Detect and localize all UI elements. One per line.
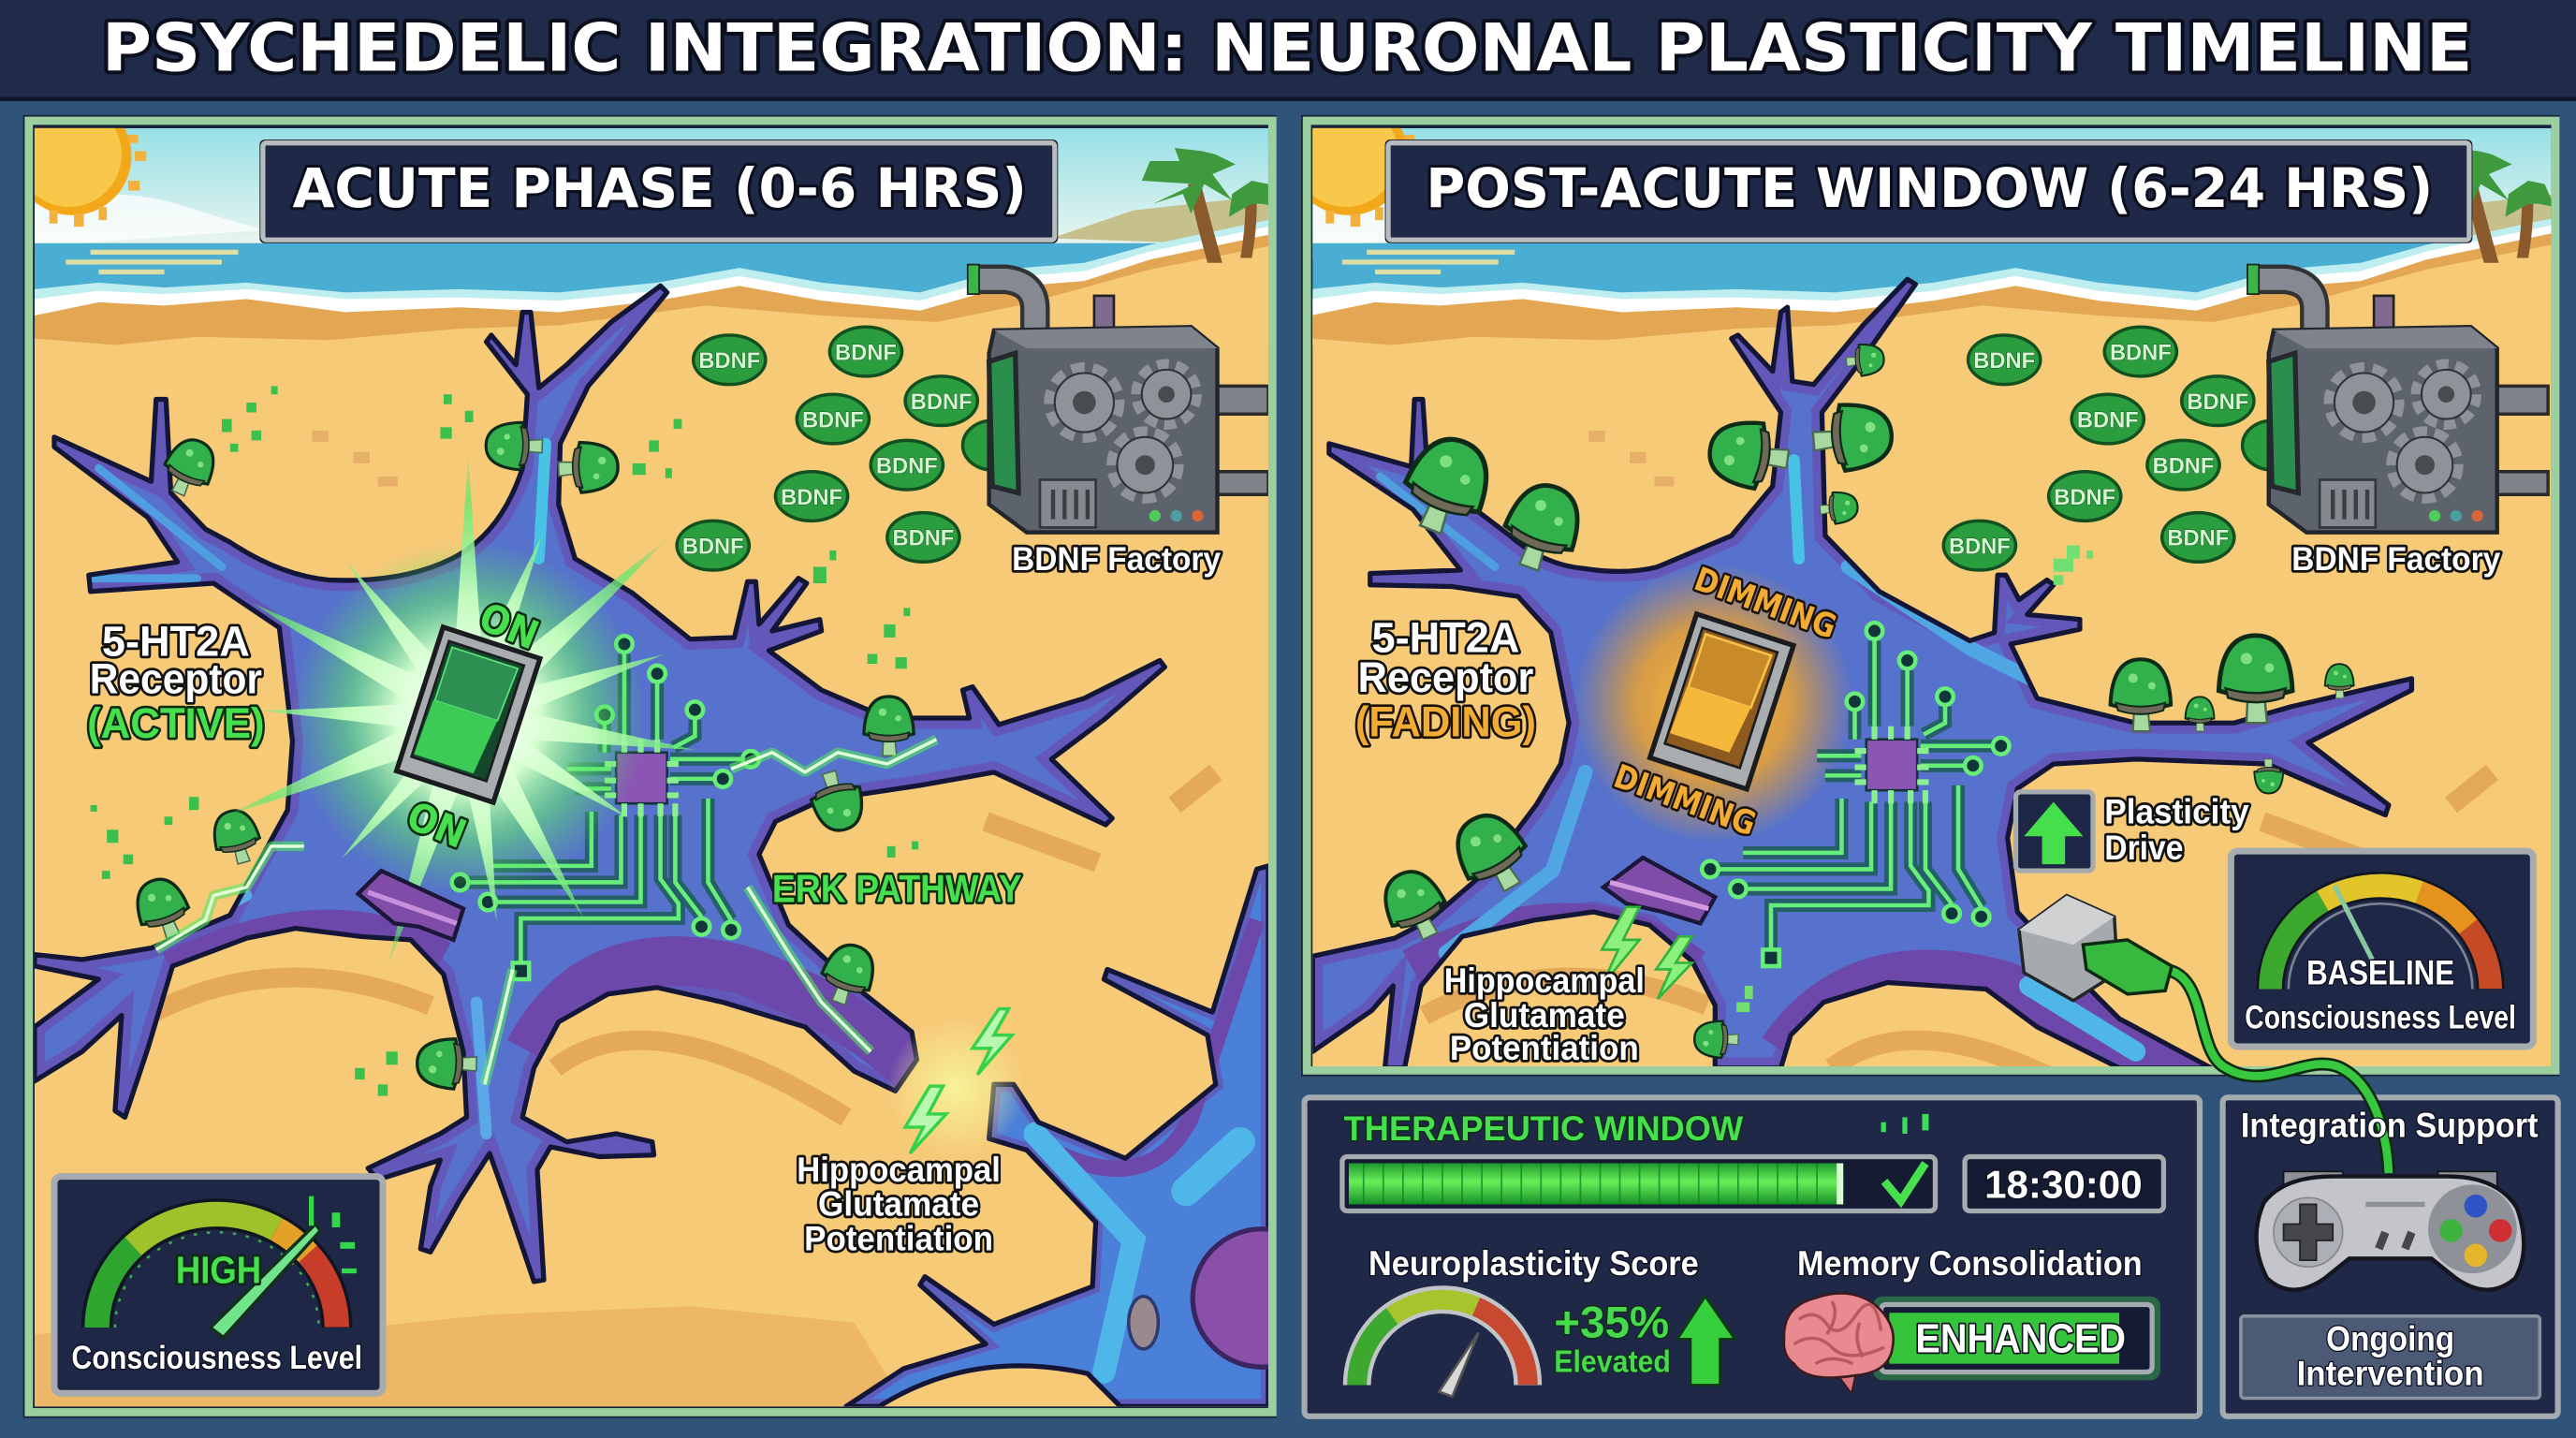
plasticity drive indicator: Plasticity — [2104, 792, 2249, 830]
sparks — [1881, 1114, 1928, 1134]
label: hippocampal glutamate: Potentiation — [804, 1220, 993, 1258]
plasticity drive indicator: Drive — [2104, 829, 2183, 867]
icon: up arrow — [1677, 1297, 1734, 1385]
switch: on — [397, 627, 540, 802]
BDNF molecules: BDNF — [802, 408, 864, 433]
label: receptor active — [87, 617, 265, 747]
glow: fading amber — [1573, 564, 1853, 843]
stat: +35% elevated: Elevated — [1554, 1344, 1671, 1379]
label: memory consolidation: Memory Consolidation — [1797, 1244, 2143, 1283]
panel: acute phase — [13, 97, 1331, 1430]
BDNF molecules — [677, 327, 1022, 570]
neuron: main acute — [35, 286, 1164, 1282]
label: hippocampal glutamate — [1444, 961, 1645, 1067]
plasticity drive indicator — [2015, 792, 2249, 871]
BDNF molecules: BDNF — [892, 527, 954, 551]
label: receptor active: (ACTIVE) — [87, 699, 265, 747]
nucleus — [1191, 1226, 1268, 1370]
status: ongoing intervention: Ongoing — [2326, 1320, 2454, 1358]
label: hippocampal glutamate: Glutamate — [1464, 996, 1625, 1034]
enhanced bar — [1873, 1297, 2160, 1380]
gauge: consciousness baseline — [2231, 851, 2533, 1047]
label: receptor fading — [1355, 614, 1536, 745]
lightning traces — [156, 740, 936, 1084]
BDNF molecules: BDNF — [2077, 408, 2139, 433]
icon: BDNF factory — [2247, 265, 2548, 533]
label: dimming top: DIMMING — [1690, 560, 1841, 647]
label: receptor active: 5-HT2A — [102, 617, 250, 665]
label: hippocampal glutamate: Potentiation — [1450, 1029, 1639, 1067]
switch: dimming — [1650, 614, 1793, 789]
label: BDNF factory: BDNF Factory — [1012, 541, 1221, 578]
title: PSYCHEDELIC INTEGRATION: NEURONAL PLASTICITY TIMELINE — [102, 9, 2472, 86]
phase label: post-acute — [1385, 139, 2472, 243]
circuit traces — [1702, 623, 2009, 966]
icon: brain — [1784, 1293, 1894, 1393]
label: on bottom: ON — [401, 793, 473, 858]
phase label: post-acute: POST-ACUTE WINDOW (6-24 HRS) — [1426, 156, 2433, 220]
frame: post-acute — [1307, 121, 2555, 1070]
label: dimming bottom: DIMMING — [1609, 757, 1761, 844]
BDNF molecules: BDNF — [2110, 341, 2172, 365]
BDNF molecules: BDNF — [876, 454, 938, 478]
label: BDNF factory: BDNF Factory — [2291, 541, 2501, 578]
icon: game controller — [2257, 1171, 2524, 1290]
mushrooms: mature — [1374, 343, 2354, 1059]
BDNF molecules: BDNF — [911, 390, 973, 415]
BDNF molecules: BDNF — [1949, 535, 2011, 559]
neuron: lower right — [843, 863, 1268, 1406]
label: hippocampal glutamate — [797, 1151, 1001, 1258]
beach scene — [13, 97, 1283, 1430]
BDNF molecules: BDNF — [2167, 527, 2229, 551]
title bar — [0, 0, 2576, 101]
gauge: consciousness high — [54, 1177, 383, 1393]
glow: activation burst — [218, 455, 698, 974]
BDNF molecules: BDNF — [698, 349, 760, 374]
timer — [1965, 1157, 2163, 1211]
neuron: post-acute — [1312, 279, 2411, 1077]
status: ongoing intervention — [2241, 1316, 2539, 1399]
label: hippocampal glutamate: Hippocampal — [797, 1151, 1001, 1189]
label: receptor fading: 5-HT2A — [1372, 614, 1519, 662]
timer: 18:30:00 — [1984, 1162, 2143, 1206]
gauge: consciousness high: HIGH — [176, 1249, 261, 1292]
gauge: consciousness high: Consciousness Level — [71, 1340, 362, 1376]
phase label: acute — [259, 139, 1058, 243]
progress bar — [1342, 1157, 1935, 1211]
panel: integration support — [2223, 1097, 2558, 1416]
label: receptor active: Receptor — [90, 655, 262, 703]
heading: therapeutic window: THERAPEUTIC WINDOW — [1344, 1109, 1743, 1148]
BDNF molecules: BDNF — [2187, 390, 2248, 415]
BDNF molecules: BDNF — [835, 341, 897, 365]
BDNF molecules: BDNF — [1973, 349, 2035, 374]
icon: plug and cable — [2019, 895, 2389, 1173]
icon: BDNF factory — [968, 265, 1268, 533]
phase label: acute: ACUTE PHASE (0-6 HRS) — [292, 156, 1027, 220]
BDNF molecules: BDNF — [781, 486, 842, 510]
label: hippocampal glutamate: Hippocampal — [1444, 961, 1645, 1000]
BDNF molecules: BDNF — [682, 535, 744, 559]
label: ERK pathway: ERK PATHWAY — [772, 867, 1022, 911]
BDNF molecules: BDNF — [2054, 486, 2115, 510]
icon: check — [1884, 1164, 1925, 1201]
gauge: consciousness baseline: BASELINE — [2306, 953, 2454, 991]
label: neuroplasticity score: Neuroplasticity Score — [1368, 1244, 1699, 1283]
receptor block with bolts — [1602, 858, 1715, 999]
label: receptor fading: (FADING) — [1355, 697, 1536, 745]
receptor block — [359, 871, 463, 940]
gauge: neuroplasticity — [1357, 1299, 1528, 1397]
synapse sparks — [887, 1009, 1025, 1157]
status: ongoing intervention: Intervention — [2297, 1354, 2484, 1392]
stat: +35% elevated: +35% — [1554, 1299, 1669, 1348]
panel: therapeutic window dashboard — [1305, 1097, 2200, 1416]
spore traces — [1736, 546, 2093, 1012]
beach scene — [1312, 127, 2552, 1066]
stat: +35% elevated — [1554, 1299, 1671, 1379]
gauge: consciousness baseline: Consciousness Level — [2245, 1000, 2516, 1036]
frame: acute — [29, 121, 1272, 1412]
BDNF molecules: BDNF — [2153, 454, 2214, 478]
green spore particles — [91, 386, 918, 1096]
circuit traces — [452, 636, 759, 979]
enhanced bar: ENHANCED — [1915, 1315, 2126, 1361]
label: receptor fading: Receptor — [1358, 653, 1534, 701]
label: hippocampal glutamate: Glutamate — [818, 1185, 979, 1224]
label: on top: ON — [473, 594, 545, 658]
panel: post-acute window — [1301, 114, 2559, 1077]
label: integration support: Integration Support — [2241, 1106, 2539, 1144]
mushrooms — [129, 421, 914, 1090]
BDNF molecules — [1943, 327, 2302, 570]
